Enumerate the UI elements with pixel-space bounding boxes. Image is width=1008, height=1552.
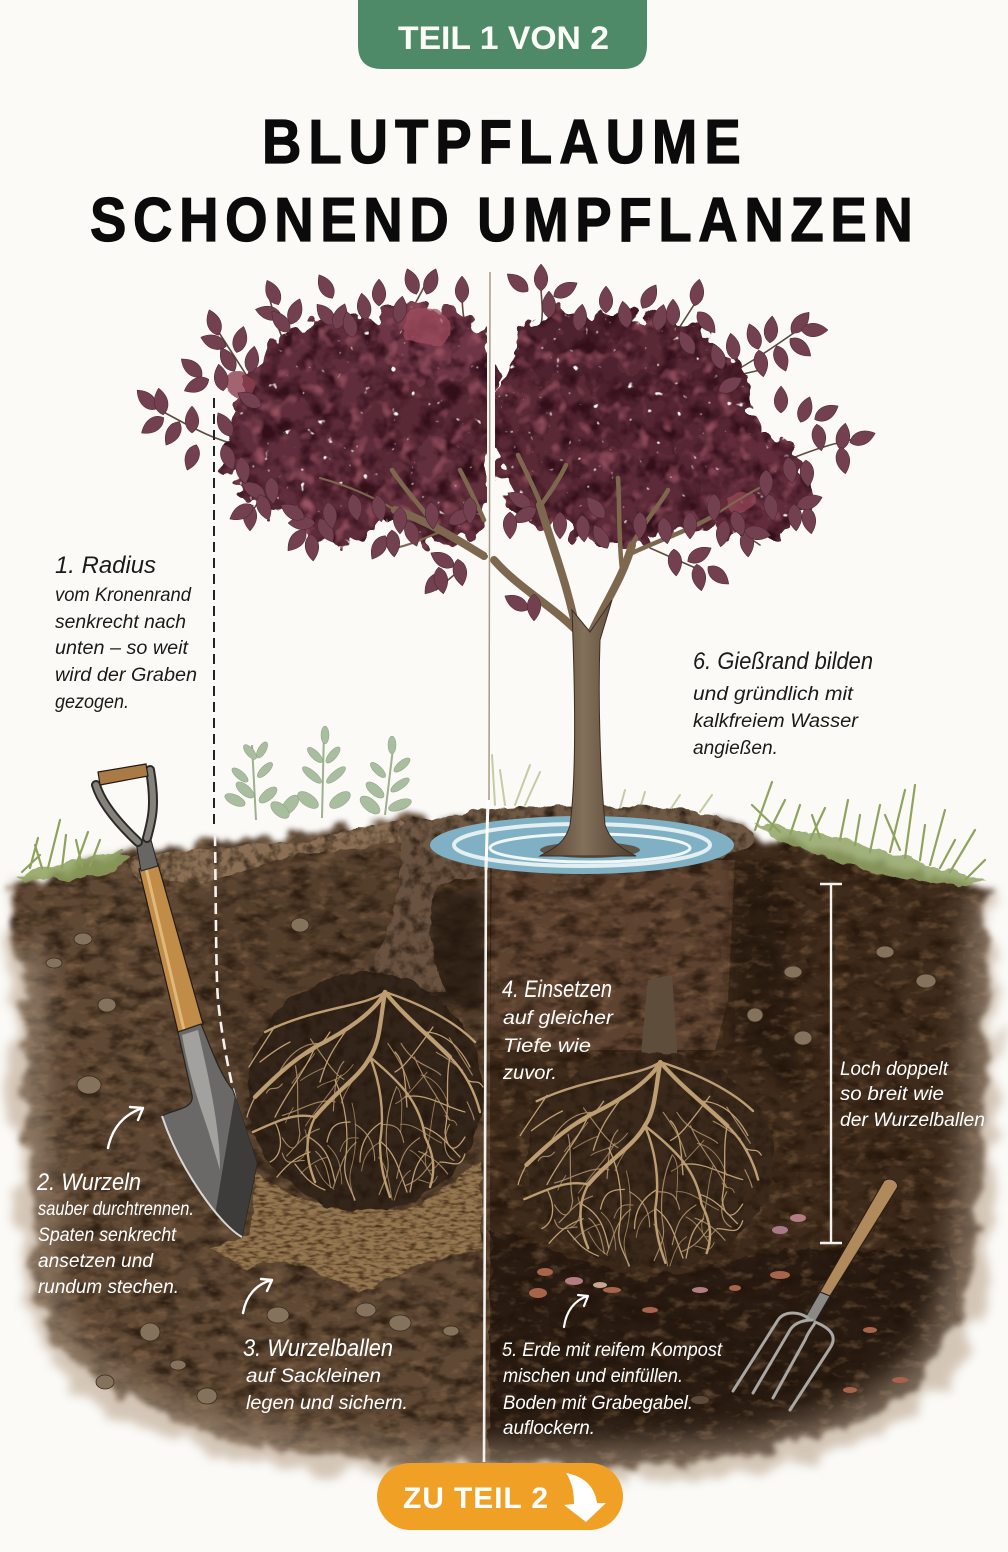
text: step 1: gezogen. [55, 692, 129, 713]
right pit: cylinder wall [490, 860, 735, 1050]
text: step 3: 3. Wurzelballen [243, 1335, 393, 1362]
text: step 1: unten – so weit [55, 638, 189, 659]
text: step 6 [693, 648, 873, 759]
button: to part 2 [377, 1463, 623, 1530]
stones [46, 918, 936, 1404]
tree branches [320, 455, 765, 640]
arrow: step 3 [243, 1279, 272, 1313]
text: step 5 [502, 1340, 723, 1439]
text: step 4: 4. Einsetzen [502, 976, 612, 1003]
text: step 1: 1. Radius [55, 552, 156, 579]
foliage leaves and sprigs [132, 264, 877, 621]
soil cross-section [0, 800, 1008, 1500]
tree crown foliage mass [224, 307, 807, 545]
text: hole width note: der Wurzelballen [840, 1110, 985, 1131]
badge: part 1 of 2: TEIL 1 VON 2 [398, 20, 609, 56]
background shrubs [223, 726, 413, 822]
text: step 3: legen und sichern. [246, 1393, 408, 1414]
water [430, 816, 734, 874]
icon: digging fork [733, 1179, 898, 1410]
raised turf band [122, 820, 420, 882]
arrow: step 5 [564, 1295, 588, 1327]
text: hole width note: Loch doppelt [840, 1059, 949, 1080]
text: step 1: vom Kronenrand [55, 585, 192, 606]
ground grass: right [752, 782, 985, 888]
text: step 4 [502, 976, 614, 1084]
centre water-side divider top [486, 800, 488, 870]
text: step 6: angießen. [693, 738, 778, 759]
soil texture dark [0, 800, 1008, 1500]
ground grass: left [14, 820, 128, 880]
centre divider in soil [484, 860, 486, 1462]
text: step 4: Tiefe wie [503, 1036, 591, 1057]
compost layer [490, 1230, 980, 1470]
text: step 4: auf gleicher [503, 1008, 614, 1029]
badge: part 1 of 2 [358, 0, 647, 69]
sprig twigs [150, 280, 860, 590]
soil texture light [13, 814, 990, 1463]
soil fringe [5, 852, 998, 1483]
icon: spade [96, 764, 257, 1237]
text: step 5: Boden mit Grabegabel. [503, 1393, 693, 1414]
text: step 2 [36, 1169, 194, 1298]
trunk [540, 600, 636, 856]
text: step 2: 2. Wurzeln [36, 1169, 141, 1196]
compost flecks [529, 1214, 908, 1404]
text: step 2: ansetzen und [38, 1251, 154, 1272]
right root ball [518, 975, 774, 1280]
text: step 6: 6. Gießrand bilden [693, 648, 873, 675]
left stump trench shadow [400, 890, 486, 1010]
dimension bar [820, 884, 842, 1243]
text: step 2: rundum stechen. [38, 1277, 179, 1298]
icon: down arrow [564, 1473, 606, 1522]
distant grass at centre [492, 755, 712, 812]
title: SCHONEND UMPFLANZEN [90, 186, 913, 255]
left trench shade [200, 862, 474, 1210]
text: hole width note: so breit wie [840, 1084, 944, 1105]
text: step 5: 5. Erde mit reifem Kompost [502, 1340, 723, 1361]
water basin rim [405, 805, 755, 871]
centre divider above ground [487, 270, 495, 800]
text: step 3: auf Sackleinen [246, 1366, 381, 1387]
text: step 1: wird der Graben [55, 665, 197, 686]
text: step 2: sauber durchtrennen. [38, 1199, 194, 1220]
text: hole width note [840, 1059, 985, 1131]
button: to part 2: ZU TEIL 2 [403, 1482, 548, 1515]
text: step 6: kalkfreiem Wasser [693, 711, 859, 732]
burlap sack [210, 1160, 482, 1292]
text: step 1: senkrecht nach [55, 612, 186, 633]
left root ball [247, 972, 483, 1215]
left stump and stem [345, 815, 486, 990]
crown radius dashed line [214, 398, 252, 1163]
text: step 2: Spaten senkrecht [38, 1225, 177, 1246]
text: step 1 [55, 552, 197, 713]
text: step 3 [243, 1335, 408, 1414]
text: step 6: und gründlich mit [693, 684, 854, 705]
text: step 4: zuvor. [502, 1063, 557, 1084]
title [90, 108, 913, 255]
title: BLUTPFLAUME [262, 108, 741, 177]
text: step 5: auflockern. [503, 1418, 595, 1439]
arrow: step 2 [108, 1107, 143, 1148]
text: step 5: mischen und einfüllen. [503, 1366, 683, 1387]
soft faded soil rim [15, 892, 992, 1468]
